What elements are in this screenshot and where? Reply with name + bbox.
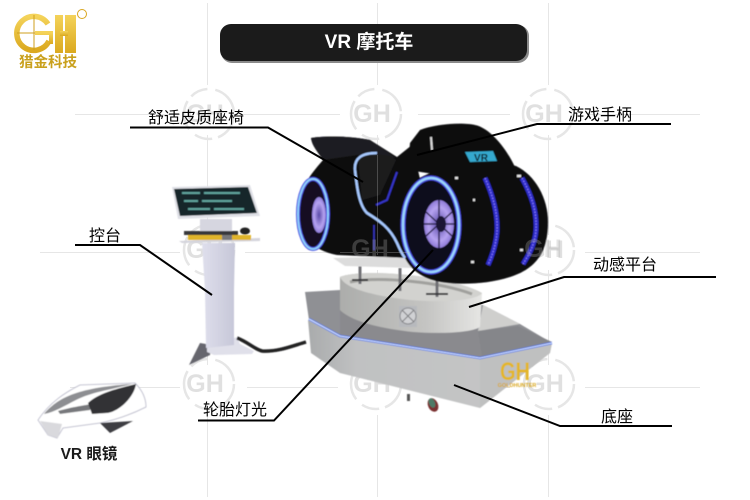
blue LED strips xyxy=(485,178,497,265)
handlebar fairing xyxy=(408,124,515,175)
watermark logos: GH xyxy=(526,236,564,264)
base blue light strip xyxy=(309,319,552,358)
console stand xyxy=(172,185,306,365)
company logo xyxy=(17,10,87,71)
watermark logos: GH xyxy=(353,370,391,398)
front wheel xyxy=(403,178,459,272)
gold GH logo on base: GH xyxy=(500,358,530,386)
seat underside platform xyxy=(333,256,412,268)
watermark logos: GH xyxy=(186,100,224,128)
VR badge: VR xyxy=(474,153,489,164)
watermark logos xyxy=(184,89,574,409)
VR badge xyxy=(465,151,497,164)
callout: base xyxy=(454,385,672,426)
callout: game handle: 游戏手柄 xyxy=(568,106,632,124)
callout: base: 底座 xyxy=(601,408,633,426)
VR goggles xyxy=(38,383,146,438)
title bar xyxy=(220,24,529,63)
pedestal posts xyxy=(360,266,437,297)
watermark logos: GH xyxy=(186,236,224,264)
power cable xyxy=(237,338,306,351)
callout: game handle xyxy=(417,106,671,155)
base front panel xyxy=(308,320,552,408)
callout: console xyxy=(75,227,212,295)
callout: motion platform xyxy=(469,256,716,307)
watermark logos: GH xyxy=(353,100,391,128)
watermark logos: GH xyxy=(526,370,564,398)
body highlights xyxy=(455,176,523,262)
callout: console: 控台 xyxy=(89,227,121,245)
console base foot xyxy=(189,343,212,365)
rear wheel xyxy=(298,179,328,249)
callout: leather seat: 舒适皮质座椅 xyxy=(148,109,244,127)
base top surface xyxy=(305,290,552,358)
callout: motion platform: 动感平台 xyxy=(593,256,657,274)
callout: leather seat xyxy=(130,109,363,182)
neon seat line xyxy=(355,153,405,258)
watermark overlay on bike xyxy=(340,155,562,263)
company logo: 猎金科技 xyxy=(19,53,78,71)
front body xyxy=(400,164,548,284)
motion base xyxy=(305,266,552,413)
rotating pedestal xyxy=(340,273,482,333)
gold GH logo on base: GOLDHUNTER xyxy=(498,383,536,389)
control shelf xyxy=(179,238,260,243)
console pillar xyxy=(202,243,235,348)
touch screen xyxy=(172,185,260,219)
caster wheels xyxy=(407,394,440,413)
watermark overlay on bike: GH xyxy=(524,235,562,263)
pedestal fan vent xyxy=(399,306,417,327)
callout: tire light: 轮胎灯光 xyxy=(203,401,267,419)
watermark logos: GH xyxy=(186,370,224,398)
watermark overlay on bike: GH xyxy=(351,235,389,263)
VR motorcycle xyxy=(298,124,548,284)
title bar: VR 摩托车 xyxy=(325,30,413,53)
label: VR goggles: VR 眼镜 xyxy=(61,444,118,463)
watermark logos: GH xyxy=(525,100,563,128)
rear seat and body xyxy=(298,137,425,258)
callout: tire light xyxy=(198,250,433,420)
